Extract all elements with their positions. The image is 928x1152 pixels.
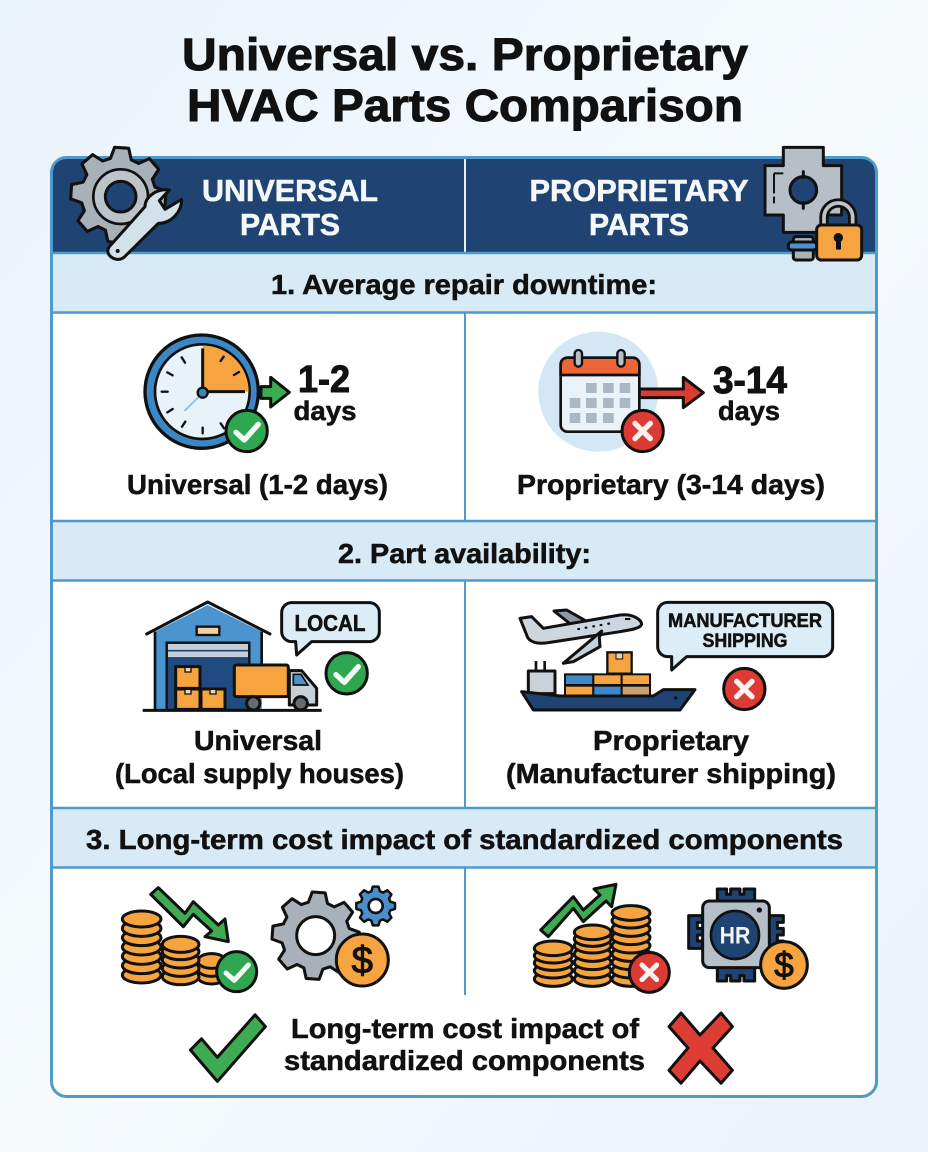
stat: 1-2 days: days	[294, 396, 356, 426]
callout: local: LOCAL	[294, 610, 366, 636]
label: proprietary downtime: Proprietary (3-14 days)	[517, 469, 825, 500]
section band 3: 3. Long-term cost impact of standardized components	[86, 824, 843, 855]
section band 1: 1. Average repair downtime:	[271, 269, 657, 300]
title	[182, 29, 748, 131]
heading: proprietary parts: PROPRIETARY	[530, 173, 749, 208]
section band 3	[53, 808, 875, 868]
label: proprietary availability: Proprietary	[593, 725, 749, 756]
label: proprietary availability	[506, 725, 836, 789]
callout: manufacturer shipping: SHIPPING	[702, 630, 788, 652]
stat: 3-14 days: 3-14	[713, 360, 787, 402]
heading: universal parts	[202, 173, 378, 242]
label: universal availability: (Local supply houses)	[115, 758, 404, 789]
label: universal availability	[115, 725, 404, 789]
icon: large green check	[190, 1015, 265, 1081]
cell: proprietary availability	[506, 602, 836, 789]
icon: calendar with x	[538, 332, 703, 452]
icon: falling coin stacks	[122, 888, 257, 992]
table card	[52, 158, 876, 1096]
icon: warehouse and truck	[143, 602, 379, 710]
heading: proprietary parts	[530, 173, 749, 242]
icon: large red x	[669, 1013, 732, 1083]
dollar sign: $	[774, 946, 794, 985]
summary text	[284, 1013, 645, 1076]
header bar	[53, 159, 875, 252]
cell: universal availability	[115, 602, 404, 789]
section band 2: 2. Part availability:	[338, 538, 591, 569]
cell: universal long-term cost	[122, 887, 395, 992]
label: universal availability: Universal	[194, 725, 322, 756]
summary text: Long-term cost impact of	[291, 1013, 640, 1044]
stat: 1-2 days	[294, 359, 356, 426]
icon: gears and dollar coin	[269, 887, 395, 986]
cell: universal downtime	[127, 333, 388, 500]
stat: 3-14 days: days	[718, 396, 780, 426]
stat: 1-2 days: 1-2	[298, 359, 350, 401]
section band 2	[53, 521, 875, 580]
title: Universal vs. Proprietary	[182, 29, 748, 80]
heading: proprietary parts: PARTS	[589, 207, 689, 242]
icon: branded chip and dollar coin	[689, 889, 807, 988]
callout: manufacturer shipping	[668, 610, 822, 652]
label: universal downtime: Universal (1-2 days)	[127, 469, 388, 500]
dollar sign: $	[352, 939, 373, 982]
title: HVAC Parts Comparison	[187, 80, 743, 131]
summary row	[190, 1013, 732, 1083]
icon: locked proprietary part	[765, 147, 862, 260]
cell: proprietary downtime	[517, 332, 825, 500]
icon: rising coin stacks	[534, 884, 669, 992]
callout: manufacturer shipping: MANUFACTURER	[668, 610, 822, 632]
cell: proprietary long-term cost	[534, 884, 807, 992]
icon: gear and wrench	[68, 144, 182, 259]
icon: clock with check	[143, 333, 289, 452]
label: proprietary availability: (Manufacturer shipping)	[506, 758, 836, 789]
chip logo: HR	[720, 922, 750, 949]
stat: 3-14 days	[713, 360, 787, 426]
heading: universal parts: UNIVERSAL	[202, 173, 378, 208]
icon: plane and container ship	[520, 602, 833, 710]
panel: comparison table	[52, 158, 876, 1096]
section band 1	[53, 253, 875, 312]
summary text: standardized components	[284, 1045, 645, 1076]
heading: universal parts: PARTS	[240, 207, 340, 242]
